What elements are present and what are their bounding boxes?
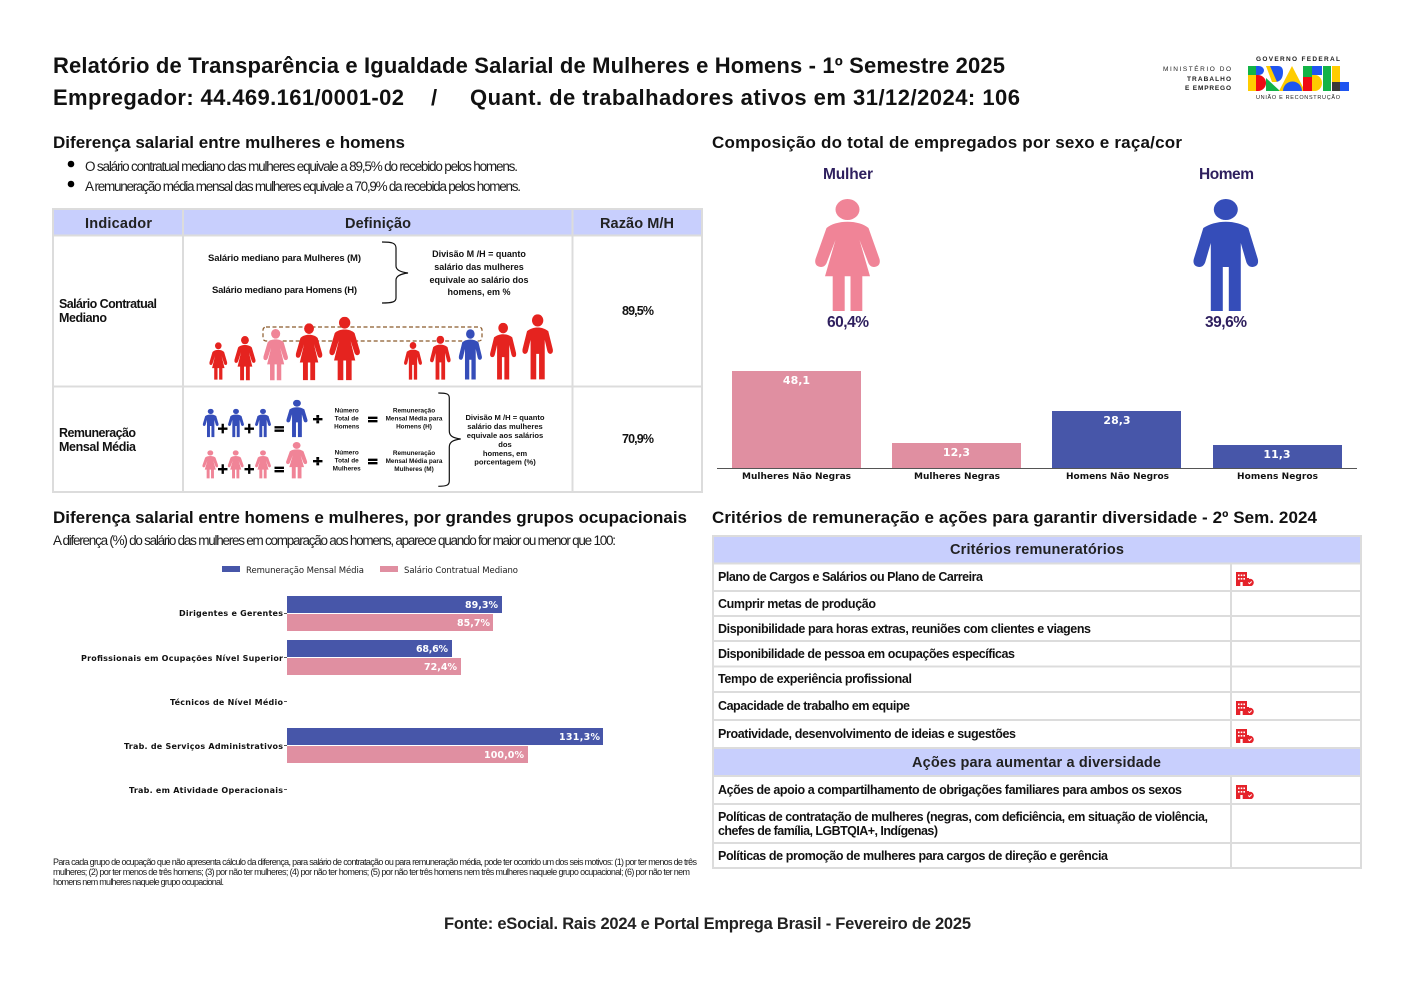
bullet list: [68, 159, 521, 194]
title: Quant. de trabalhadores ativos em 31/12/2024: 106: [470, 85, 1020, 110]
diagram: remuneração média: +: [217, 421, 229, 437]
diagram: remuneração média: porcentagem (%): [474, 458, 536, 466]
bar chart: raça/cor: 11,3: [1263, 448, 1291, 461]
pictogram: mulher: 60,4%: [827, 314, 869, 331]
diagram: remuneração média: [202, 393, 545, 486]
actions list: Políticas de promoção de mulheres para cargos de direção e gerência: [718, 849, 1109, 863]
logo: ministério do trabalho e governo federal: E EMPREGO: [1185, 85, 1231, 92]
diagram: salário mediano: [208, 242, 553, 380]
bar chart: raça/cor: 28,3: [1103, 414, 1131, 427]
logo: ministério do trabalho e governo federal: UNIÃO E RECONSTRUÇÃO: [1256, 94, 1341, 101]
diagram: salário mediano: equivale ao salário dos: [429, 275, 529, 285]
bar chart: raça/cor: Mulheres Não Negras: [742, 472, 851, 482]
title: Relatório de Transparência e Igualdade Salarial de Mulheres e Homens - 1º Semestre 2025: [53, 53, 1005, 78]
heading: critérios: Critérios de remuneração e ações para garantir diversidade - 2º Sem. 2024: [712, 508, 1318, 527]
diagram: remuneração média: equivale aos salários: [467, 431, 543, 440]
icons: empresa com critério: [1236, 572, 1254, 799]
diagram: remuneração média: ÷: [312, 454, 324, 470]
diagram: remuneração média: ÷: [312, 412, 324, 428]
diagram: remuneração média: homens, em: [483, 449, 527, 458]
panel: tabela indicadores: [53, 209, 702, 492]
bar chart: grupos ocupacionais: Técnicos de Nível Médio: [170, 697, 284, 707]
criteria list: Disponibilidade para horas extras, reuniões com clientes e viagens: [718, 622, 1091, 636]
diagram: remuneração média: =: [367, 412, 379, 428]
table header: [85, 216, 674, 232]
footnote: homens nem mulheres naquele grupo ocupacional.: [53, 877, 224, 887]
diagram: salário mediano: homens, em %: [447, 287, 511, 297]
bar chart: grupos ocupacionais: Profissionais em Ocupações Nível Superior: [81, 654, 283, 663]
diagram: remuneração média: Total de: [335, 416, 359, 422]
diagram: remuneração média: =: [367, 454, 379, 470]
diagram: remuneração média: Total de: [335, 458, 359, 464]
bar chart: raça/cor: 48,1: [783, 374, 810, 387]
bar chart: raça/cor: [717, 371, 1357, 482]
criteria list: Cumprir metas de produção: [718, 597, 876, 611]
table header: Razão M/H: [600, 216, 674, 232]
diagram: remuneração média: Homens (H): [396, 424, 432, 430]
logo: ministério do trabalho e governo federal: TRABALHO: [1187, 76, 1231, 83]
value: 70,9%: 70,9%: [622, 432, 654, 446]
criteria list: Capacidade de trabalho em equipe: [718, 699, 910, 713]
panel: tabela critérios: [713, 536, 1361, 868]
diagram: remuneração média: Mensal Média para: [386, 416, 443, 422]
criteria list: Tempo de experiência profissional: [718, 672, 912, 686]
diagram: remuneração média: Mulheres (M): [394, 466, 434, 473]
diagram: salário mediano: salário das mulheres: [434, 262, 524, 272]
row label: remuneração: Remuneração: [59, 426, 136, 440]
bar chart: grupos ocupacionais: 131,3%: [559, 732, 600, 743]
criteria list: Plano de Cargos e Salários ou Plano de Carreira: [718, 570, 984, 584]
pictogram: homem: [1193, 166, 1258, 331]
actions list: chefes de família, LGBTQIA+, Indígenas): [718, 824, 938, 838]
row label: salário contratual: Mediano: [59, 311, 107, 325]
diagram: remuneração média: Remuneração: [393, 408, 435, 414]
diagram: remuneração média: =: [273, 462, 285, 478]
value: 89,5%: 89,5%: [622, 304, 654, 318]
title: Empregador: 44.469.161/0001-02: [53, 85, 404, 110]
pictogram: mulher: Mulher: [823, 166, 873, 183]
bar chart: grupos ocupacionais: 89,3%: [465, 600, 498, 611]
logo: ministério do trabalho e governo federal: MINISTÉRIO DO: [1163, 64, 1231, 73]
logo: ministério do trabalho e governo federal: [1163, 56, 1349, 101]
diagram: remuneração média: salário das mulheres: [467, 422, 543, 431]
actions list: Ações de apoio a compartilhamento de obrigações familiares para ambos os sexos: [718, 783, 1182, 797]
bullet list: O salário contratual mediano das mulheres equivale a 89,5% do recebido pelos homens.: [85, 159, 518, 174]
diagram: remuneração média: Homens: [334, 424, 360, 430]
title: [53, 53, 1020, 110]
legend: Remuneração Mensal Média: [246, 565, 364, 576]
bar chart: grupos ocupacionais: Trab. em Atividade Operacionais: [129, 786, 283, 795]
bar chart: grupos ocupacionais: 85,7%: [457, 618, 490, 629]
table heading: ações: Ações para aumentar a diversidade: [912, 755, 1161, 771]
table header: Indicador: [85, 216, 152, 232]
bar chart: raça/cor: Mulheres Negras: [914, 472, 1000, 482]
bar chart: raça/cor: 12,3: [943, 446, 970, 459]
legend: [222, 565, 518, 576]
pictogram: homem: 39,6%: [1205, 314, 1247, 331]
criteria list: Proatividade, desenvolvimento de ideias e sugestões: [718, 727, 1016, 741]
heading: composição: Composição do total de empregados por sexo e raça/cor: [712, 133, 1182, 152]
legend: Salário Contratual Mediano: [404, 566, 518, 576]
logo: ministério do trabalho e governo federal: GOVERNO FEDERAL: [1256, 56, 1340, 63]
footnote: Para cada grupo de ocupação que não apresenta cálculo da diferença, para salário de contratação ou para remuneração média, pode ter ocorrido um dos seis motivos: (1) por ter menos de três: [53, 857, 697, 867]
heading: diferença salarial: Diferença salarial entre mulheres e homens: [53, 133, 405, 152]
bar chart: raça/cor: Homens Não Negros: [1066, 472, 1169, 482]
bar chart: raça/cor: Homens Negros: [1237, 472, 1318, 482]
actions list: Políticas de contratação de mulheres (negras, com deficiência, em situação de violência,: [718, 810, 1208, 824]
actions list: [718, 783, 1208, 863]
row label: remuneração: Mensal Média: [59, 440, 137, 454]
row label: remuneração: [59, 426, 137, 454]
diagram: remuneração média: Número: [335, 408, 359, 414]
row label: salário contratual: [59, 297, 157, 325]
diagram: salário mediano: Salário mediano para Homens (H): [212, 285, 357, 296]
table heading: critérios remuneratórios: Critérios remuneratórios: [950, 542, 1124, 558]
diagram: remuneração média: Mulheres: [333, 466, 361, 472]
source: Fonte: eSocial. Rais 2024 e Portal Emprega Brasil - Fevereiro de 2025: [444, 915, 971, 933]
title: /: [431, 85, 437, 110]
footnote: [53, 857, 697, 887]
table header: Definição: [345, 216, 411, 232]
bar chart: grupos ocupacionais: Dirigentes e Gerentes: [179, 609, 283, 618]
bar chart: grupos ocupacionais: 100,0%: [484, 750, 524, 761]
diagram: remuneração média: +: [243, 421, 255, 437]
footnote: mulheres; (2) por ter menos de três homens; (3) por não ter mulheres; (4) por não ter homens; (5) por não ter três homens nem três mulheres naquele grupo ocupacional; (6) por não ter nem: [53, 867, 690, 877]
bullet list: A remuneração média mensal das mulheres equivale a 70,9% da recebida pelos homens.: [85, 179, 521, 194]
bar chart: grupos ocupacionais: 68,6%: [416, 644, 448, 655]
diagram: salário mediano: Salário mediano para Mulheres (M): [208, 253, 361, 264]
diagram: salário mediano: Divisão M /H = quanto: [432, 249, 526, 259]
criteria list: Disponibilidade de pessoa em ocupações específicas: [718, 647, 1015, 661]
heading: grupos ocupacionais: Diferença salarial entre homens e mulheres, por grandes grupos ocupacionais: [53, 508, 687, 527]
bar chart: grupos ocupacionais: Trab. de Serviços Administrativos: [124, 742, 283, 751]
diagram: remuneração média: +: [243, 462, 255, 478]
criteria list: [718, 570, 1091, 741]
row label: salário contratual: Salário Contratual: [59, 297, 157, 311]
pictogram: homem: Homem: [1199, 166, 1254, 183]
diagram: remuneração média: Mensal Média para: [386, 458, 443, 465]
diagram: remuneração média: dos: [498, 440, 512, 449]
diagram: remuneração média: =: [273, 422, 285, 438]
bar chart: grupos ocupacionais: [81, 596, 603, 795]
diagram: remuneração média: Número: [335, 450, 359, 456]
diagram: remuneração média: Remuneração: [393, 450, 435, 457]
diagram: remuneração média: +: [217, 462, 229, 478]
subtitle: nota do gráfico: A diferença (%) do salário das mulheres em comparação aos homens, aparece quando for maior ou menor que 100:: [53, 533, 616, 548]
diagram: remuneração média: Divisão M /H = quanto: [465, 413, 545, 422]
pictogram: mulher: [815, 166, 880, 331]
bar chart: grupos ocupacionais: 72,4%: [424, 662, 457, 673]
